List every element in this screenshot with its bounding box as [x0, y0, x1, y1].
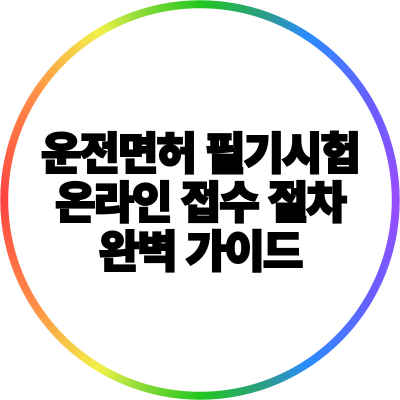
title line 1: 운전면허 필기시험: [41, 130, 359, 179]
title line 2: 온라인 접수 절차: [55, 179, 345, 228]
title line 3: 완벽 가이드: [99, 228, 301, 277]
title: [41, 130, 359, 277]
